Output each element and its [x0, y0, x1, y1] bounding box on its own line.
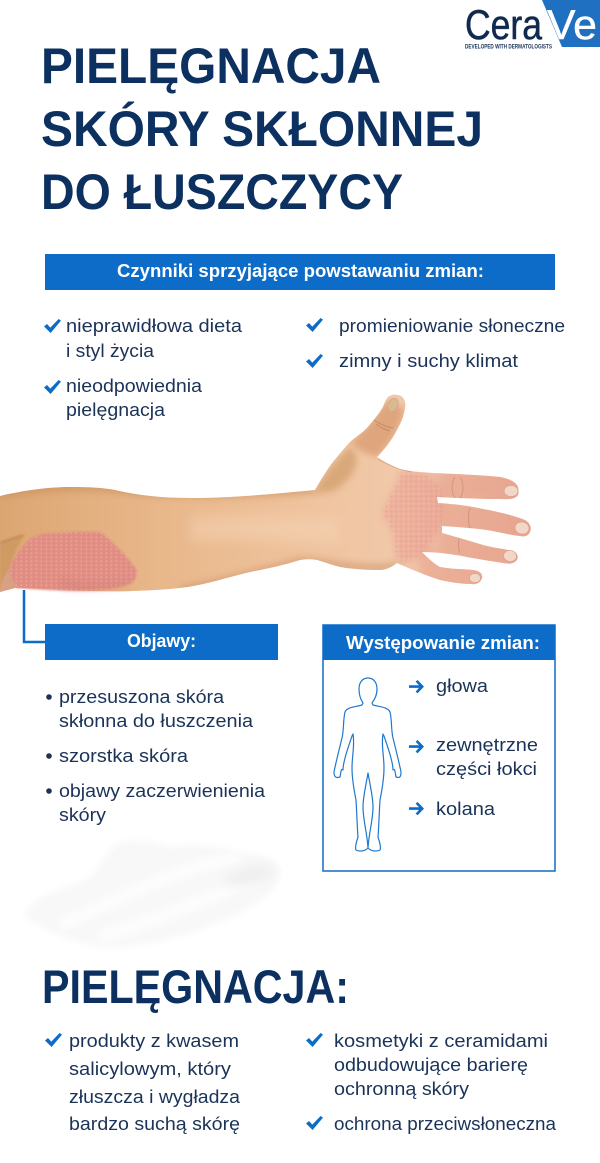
heading bar: symptoms	[45, 624, 278, 660]
title	[41, 38, 483, 220]
panel: occurrence of lesions: kolana	[436, 799, 496, 819]
arrow: head	[409, 680, 424, 693]
psoriasis patch on elbow	[10, 532, 137, 591]
list: care right: ochronną skóry	[334, 1079, 469, 1099]
arrow: elbows	[409, 740, 424, 753]
list: symptoms: skóry	[59, 805, 106, 825]
heading bar: factors	[45, 254, 555, 290]
cream swatch	[24, 841, 280, 948]
list: symptoms: szorstka skóra	[59, 746, 189, 766]
list: factors right: promieniowanie słoneczne	[339, 316, 565, 336]
logo: CeraVe	[465, 0, 600, 50]
logo: CeraVe: Ve	[547, 1, 597, 48]
list: symptoms: przesuszona skóra	[59, 687, 225, 707]
list: care left: złuszcza i wygładza	[69, 1087, 241, 1107]
finger creases	[452, 477, 470, 553]
title: PIELĘGNACJA	[41, 38, 381, 94]
list: care right: ochrona przeciwsłoneczna	[334, 1114, 557, 1134]
list: care right: odbudowujące barierę	[334, 1055, 528, 1075]
heading: care: PIELĘGNACJA:	[42, 960, 349, 1013]
arrow: knees	[409, 802, 424, 815]
fingernails	[386, 397, 530, 582]
hand shading	[315, 447, 356, 493]
thumb creases	[374, 420, 393, 431]
title: SKÓRY SKŁONNEJ	[41, 101, 483, 157]
elbow fold	[0, 536, 23, 587]
list: symptoms	[46, 687, 266, 825]
list: care right	[306, 1031, 557, 1134]
arm shading	[0, 486, 315, 494]
list: factors right	[306, 316, 565, 371]
list: factors left	[44, 316, 243, 420]
list: factors right: zimny i suchy klimat	[339, 351, 518, 371]
logo: CeraVe: Cera	[465, 1, 543, 48]
heading bar: factors: Czynniki sprzyjające powstawaniu zmian:	[117, 261, 484, 281]
heading bar: symptoms: Objawy:	[127, 631, 196, 651]
list: care right: kosmetyki z ceramidami	[334, 1031, 548, 1051]
list: care left	[45, 1031, 241, 1134]
list: symptoms: objawy zaczerwienienia	[59, 781, 266, 801]
rash on knuckles	[382, 472, 444, 562]
panel: occurrence of lesions	[323, 625, 555, 871]
list: symptoms: skłonna do łuszczenia	[59, 711, 254, 731]
list: care left: produkty z kwasem	[69, 1031, 239, 1051]
list: factors left: pielęgnacja	[66, 400, 166, 420]
panel: occurrence of lesions: głowa	[436, 676, 489, 696]
arm silhouette	[0, 395, 531, 592]
panel: occurrence of lesions: części łokci	[436, 759, 537, 779]
logo: CeraVe: DEVELOPED WITH DERMATOLOGISTS	[465, 44, 552, 50]
connector line	[24, 590, 46, 642]
panel: occurrence of lesions: zewnętrzne	[436, 735, 538, 755]
panel: occurrence of lesions: Występowanie zmian:	[346, 633, 540, 653]
list: factors left: nieprawidłowa dieta	[66, 316, 243, 336]
title: DO ŁUSZCZYCY	[41, 164, 403, 220]
list: care left: salicylowym, który	[69, 1059, 231, 1079]
list: factors left: i styl życia	[66, 341, 155, 361]
icon: body outline	[334, 678, 401, 851]
arm photo illustration	[0, 395, 535, 592]
list: care left: bardzo suchą skórę	[69, 1114, 240, 1134]
list: factors left: nieodpowiednia	[66, 376, 203, 396]
